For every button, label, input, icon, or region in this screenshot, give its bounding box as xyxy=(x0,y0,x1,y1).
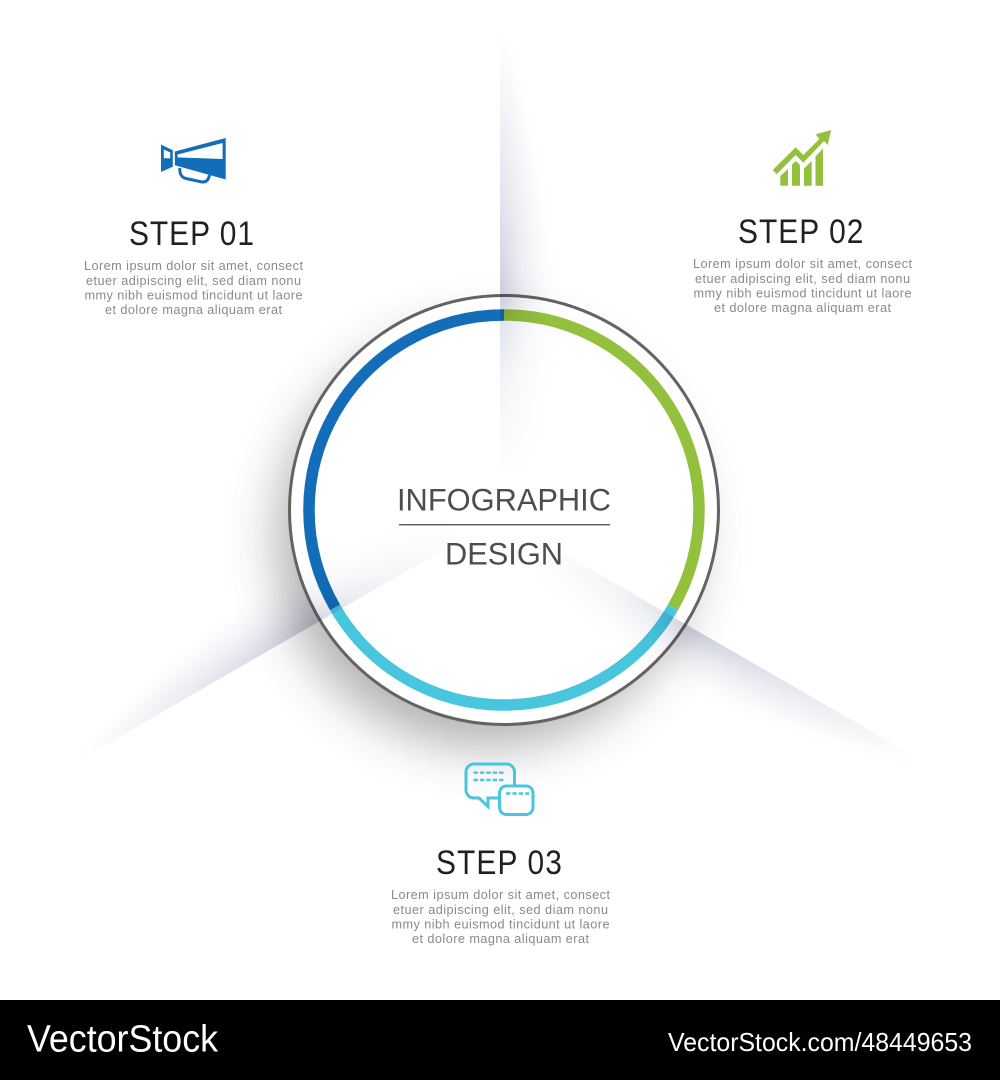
central circle xyxy=(290,296,718,724)
ring segment: step 01 blue xyxy=(309,315,504,608)
step 03 heading: STEP 03 xyxy=(436,843,562,881)
icon: growth chart xyxy=(773,130,831,186)
step 01 text xyxy=(84,214,303,317)
step 01 heading: STEP 01 xyxy=(129,214,254,252)
step 02 heading: STEP 02 xyxy=(738,212,863,250)
step 03 text xyxy=(391,843,610,946)
step 01 body: Lorem ipsum dolor sit amet, consect xyxy=(84,259,303,273)
fold shadow: lower right xyxy=(588,570,878,737)
footer logo: VectorStock xyxy=(27,1018,219,1060)
step 03 body: Lorem ipsum dolor sit amet, consect xyxy=(391,888,610,902)
step 02 body xyxy=(693,257,912,315)
center title xyxy=(397,482,611,572)
step 02 body: et dolore magna aliquam erat xyxy=(714,301,891,315)
step 03 body: etuer adipiscing elit, sed diam nonu xyxy=(393,903,608,917)
ring segment: step 03 cyan xyxy=(335,608,673,705)
step 01 body: mmy nibh euismod tincidunt ut laore xyxy=(84,288,302,302)
fold shadow: top xyxy=(500,80,537,414)
step 03 body: mmy nibh euismod tincidunt ut laore xyxy=(392,918,610,932)
step 02 text xyxy=(693,212,912,315)
fold shadow: lower left xyxy=(121,567,410,735)
icon: megaphone xyxy=(161,138,226,182)
step 02 body: etuer adipiscing elit, sed diam nonu xyxy=(695,272,910,286)
step 03 body: et dolore magna aliquam erat xyxy=(412,932,589,946)
step 01 body: et dolore magna aliquam erat xyxy=(105,303,282,317)
step 01 body xyxy=(84,259,303,317)
title line: design: DESIGN xyxy=(445,536,563,572)
step 02 body: Lorem ipsum dolor sit amet, consect xyxy=(693,257,912,271)
title line: infographic: INFOGRAPHIC xyxy=(397,482,611,518)
title divider xyxy=(399,524,610,525)
icon: chat bubbles xyxy=(466,764,533,814)
step 02 body: mmy nibh euismod tincidunt ut laore xyxy=(694,286,912,300)
footer bar xyxy=(0,1000,1000,1080)
footer image id: VectorStock.com/48449653 xyxy=(668,1027,972,1057)
ring segment: step 02 green xyxy=(504,315,699,608)
step 01 body: etuer adipiscing elit, sed diam nonu xyxy=(86,274,301,288)
circle drop shadow xyxy=(278,330,694,746)
step 03 body xyxy=(391,888,610,946)
